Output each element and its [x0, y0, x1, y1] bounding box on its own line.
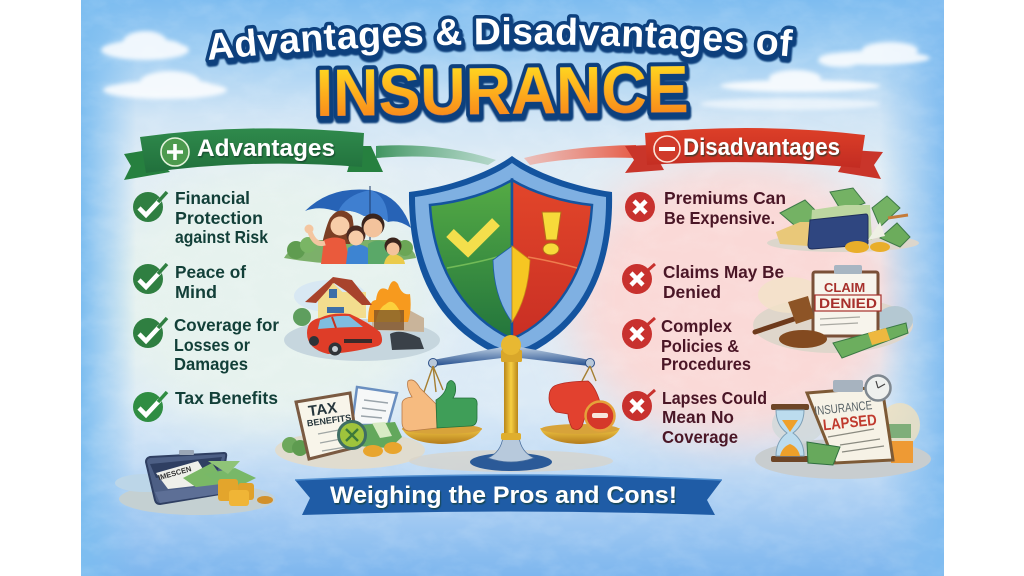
text: CLAIM: CLAIM	[824, 280, 865, 295]
title word: INSURANCE: INSURANCE	[315, 51, 689, 130]
item: Complex Policies & Procedures	[622, 316, 751, 374]
item: Claims May Be Denied: Denied	[663, 282, 721, 302]
icon: minus circle	[654, 136, 680, 162]
base	[470, 433, 552, 471]
icon: exclamation mark	[542, 212, 561, 255]
shield centre yellow half	[512, 246, 530, 322]
item: Financial Protection against Risk	[133, 188, 268, 247]
item: Complex Policies & Procedures: Procedures	[661, 354, 751, 374]
item: Tax Benefits	[133, 388, 278, 422]
item: Premiums Can Be Expensive	[625, 188, 786, 228]
item: Premiums Can Be Expensive: Be Expensive.	[664, 208, 775, 228]
item: Claims May Be Denied	[622, 262, 784, 302]
green connector sweep	[376, 145, 496, 165]
illustration: family under umbrella	[284, 186, 416, 264]
item: Coverage for Losses or Damages: Damages	[174, 354, 248, 374]
ribbon label: Weighing the Pros and Cons!	[330, 482, 677, 509]
title line: Advantages & Disadvantages of: Advantages & Disadvantages of	[205, 14, 798, 68]
item: Financial Protection against Risk: against Risk	[175, 227, 268, 247]
icon: plus circle	[161, 138, 189, 166]
text: INSURANCE LAPSED: INSURANCE	[814, 398, 873, 418]
item: Coverage for Losses or Damages: Coverage for	[174, 315, 279, 335]
item: Premiums Can Be Expensive: Premiums Can	[664, 188, 786, 208]
icon: minus badge	[586, 402, 614, 430]
item: Peace of Mind: Peace of	[175, 262, 246, 282]
illustration: claim denied with gavel	[753, 265, 913, 358]
item: Financial Protection against Risk: Protection	[175, 208, 263, 228]
beam	[428, 335, 594, 368]
item: Coverage for Losses or Damages	[133, 315, 279, 374]
panel: advantages list	[133, 188, 279, 422]
right pan with thumbs down	[540, 366, 620, 444]
banner: Advantages	[124, 128, 383, 180]
item: Lapses Could Mean No Coverage: Lapses Could	[662, 388, 767, 408]
item: Lapses Could Mean No Coverage	[622, 388, 767, 447]
red connector sweep	[524, 145, 636, 165]
clipboard text	[304, 398, 352, 429]
icon: yellow check	[450, 222, 496, 250]
icon: skin thumb	[402, 380, 437, 431]
bottom ribbon	[295, 475, 722, 515]
text: INSURANCE LAPSED: LAPSED	[822, 412, 878, 434]
item: Lapses Could Mean No Coverage: Coverage	[662, 427, 738, 447]
banner: Disadvantages	[625, 128, 883, 179]
item: Complex Policies & Procedures: Complex	[661, 316, 732, 336]
banner label: Disadvantages	[683, 134, 840, 161]
illustration: briefcase with cash and coins	[115, 450, 275, 515]
illustration: tax benefits clipboard	[275, 387, 425, 469]
item: Peace of Mind	[133, 262, 246, 302]
title	[205, 14, 798, 130]
clipboard text: BENEFITS	[306, 412, 352, 429]
clipboard text: TAX	[307, 399, 338, 420]
text: INSURANCE LAPSED	[814, 398, 878, 435]
item: Coverage for Losses or Damages: Losses or	[174, 335, 250, 355]
shield centre blue half	[493, 246, 512, 322]
panel: disadvantages list	[622, 188, 786, 447]
icon: green thumb	[436, 380, 477, 428]
illustration: house fire and car accident	[284, 277, 440, 361]
balance scale	[402, 335, 620, 471]
illustration: wallet and cash	[767, 188, 919, 253]
item: Lapses Could Mean No Coverage: Mean No	[662, 407, 734, 427]
item: Peace of Mind: Mind	[175, 282, 217, 302]
banner label: Advantages	[197, 135, 335, 162]
item: Financial Protection against Risk: Financial	[175, 188, 250, 208]
item: Complex Policies & Procedures: Policies &	[661, 336, 739, 356]
icon: red thumb down	[549, 381, 600, 430]
shield	[409, 156, 612, 360]
item: Claims May Be Denied: Claims May Be	[663, 262, 784, 282]
scale shadow	[409, 450, 613, 472]
item: Tax Benefits: Tax Benefits	[175, 388, 278, 408]
illustration: insurance lapsed	[755, 376, 931, 479]
left pan with thumbs up	[402, 366, 482, 444]
clouds	[101, 31, 930, 110]
pole	[504, 360, 518, 435]
case paper text: IMESCEN	[157, 464, 192, 482]
stamp: DENIED: DENIED	[819, 296, 877, 311]
